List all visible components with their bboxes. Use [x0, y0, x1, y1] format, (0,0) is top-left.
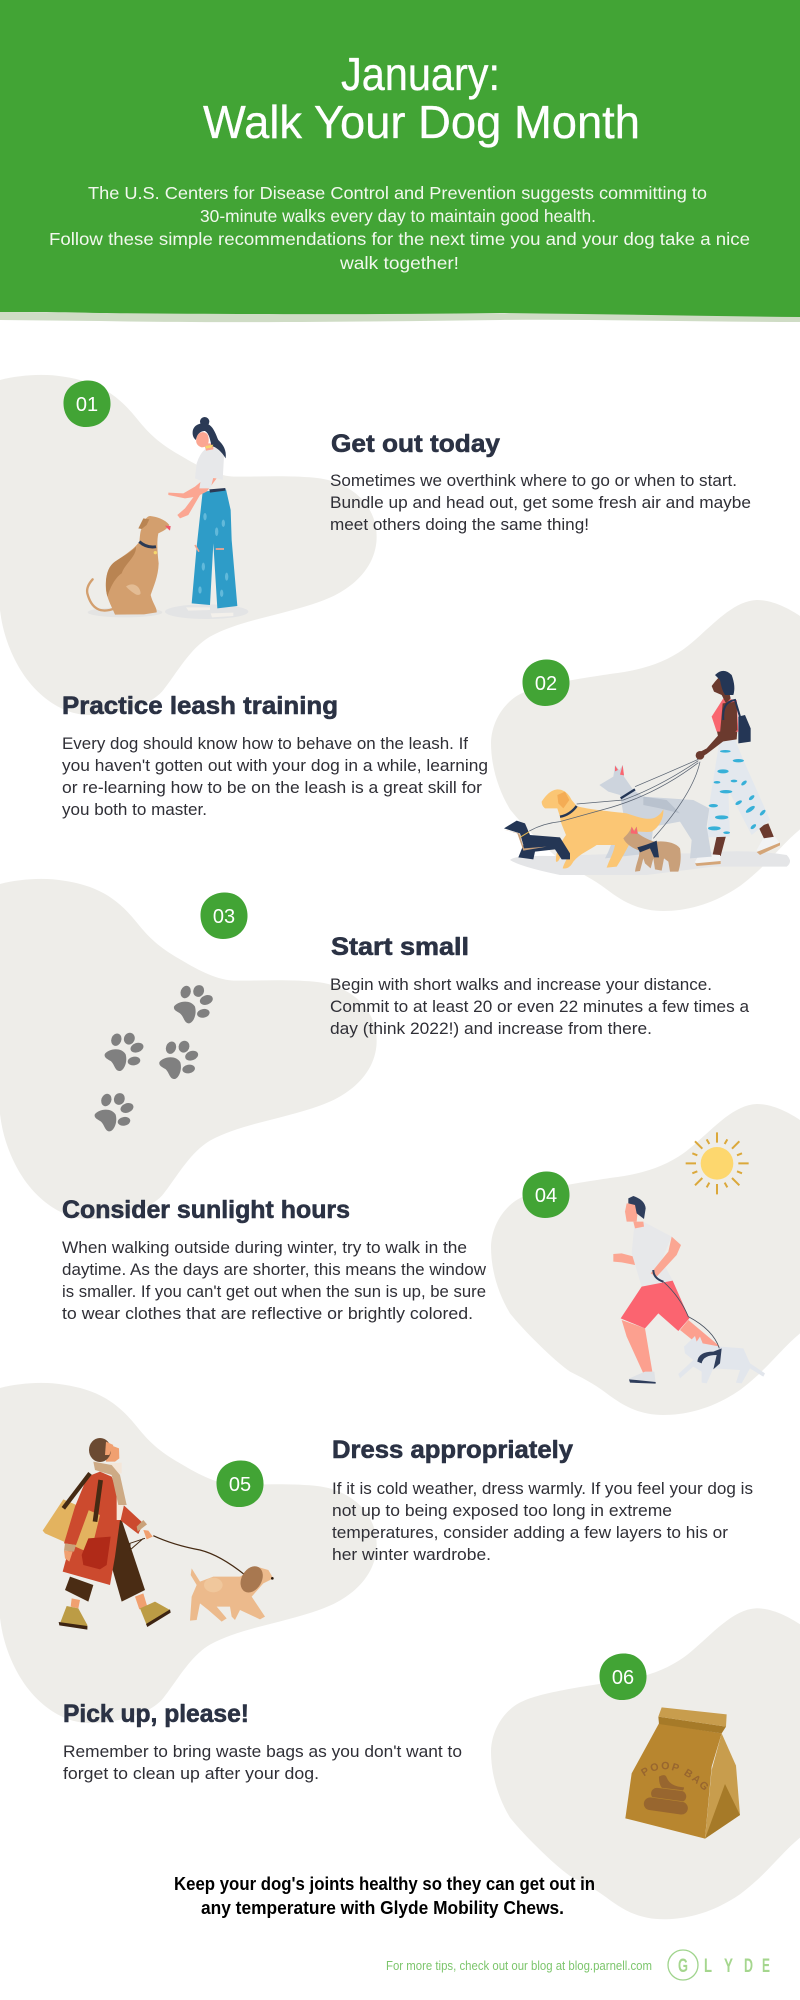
- intro text: Follow these simple recommendations for the next time you and your dog take a nice: [49, 229, 750, 249]
- background blob 3: [0, 879, 377, 1219]
- number badge 04: [522, 1171, 570, 1218]
- illustration: woman in red coat walking dog: [43, 1438, 274, 1630]
- logo: Glyde: L: [704, 1956, 712, 1977]
- background blob 4: [491, 1104, 800, 1415]
- body text: Begin with short walks and increase your distance.: [330, 976, 712, 994]
- body text: When walking outside during winter, try to walk in the: [62, 1239, 467, 1257]
- number badge 04: 04: [535, 1185, 557, 1207]
- icon: sun: [686, 1132, 749, 1194]
- footer: [386, 1950, 770, 1980]
- background blob 2: [491, 600, 800, 911]
- number badge 05: 05: [229, 1474, 251, 1496]
- panel: step 2 practice leash training: [62, 600, 800, 911]
- body text: Commit to at least 20 or even 22 minutes a few times a: [330, 998, 750, 1016]
- number badge 01: 01: [76, 394, 98, 416]
- callout: closing message: [174, 1874, 595, 1918]
- number badge 06: 06: [612, 1667, 634, 1689]
- panel: step 3 start small: [0, 879, 750, 1219]
- intro text: [49, 183, 750, 273]
- body text: temperatures, consider adding a few layers to his or: [332, 1524, 729, 1542]
- body text: Bundle up and head out, get some fresh air and maybe: [330, 494, 751, 512]
- heading: Get out today: [331, 430, 500, 458]
- number badge 03: 03: [213, 906, 235, 928]
- body text: to wear clothes that are reflective or brightly colored.: [62, 1305, 473, 1323]
- icon: poop bag: [625, 1707, 740, 1839]
- icon: poop bag: POOP BAG: [640, 1762, 708, 1790]
- number badge 01: [63, 380, 111, 427]
- body text: [332, 1480, 753, 1564]
- body text: meet others doing the same thing!: [330, 516, 589, 534]
- background blob 1: [0, 375, 377, 715]
- icon: paw prints: [95, 983, 214, 1131]
- background blob 5: [0, 1383, 377, 1723]
- body text: is smaller. If you can't get out when the sun is up, be sure: [62, 1283, 486, 1301]
- logo: Glyde: G: [678, 1956, 688, 1977]
- body text: or re-learning how to be on the leash is a great skill for: [62, 779, 483, 797]
- number badge 06: [599, 1653, 647, 1700]
- intro text: The U.S. Centers for Disease Control and Prevention suggests committing to: [88, 183, 707, 203]
- body text: [330, 472, 751, 534]
- panel: step 6 pick up please: [63, 1608, 800, 1952]
- body text: Every dog should know how to behave on the leash. If: [62, 735, 468, 753]
- callout: closing message: Keep your dog's joints healthy so they can get out in: [174, 1874, 595, 1894]
- background blob 6: [491, 1608, 800, 1919]
- logo: Glyde: Y: [724, 1956, 733, 1977]
- body text: you both to master.: [62, 801, 207, 819]
- body text: Sometimes we overthink where to go or when to start.: [330, 472, 737, 490]
- heading: Consider sunlight hours: [62, 1196, 350, 1224]
- body text: daytime. As the days are shorter, this means the window: [62, 1261, 486, 1279]
- panel: step 5 dress appropriately: [0, 1383, 753, 1723]
- number badge 02: 02: [535, 673, 557, 695]
- logo: Glyde: E: [762, 1956, 770, 1977]
- body text: [62, 735, 488, 819]
- intro text: walk together!: [339, 253, 459, 273]
- title: January:: [341, 48, 500, 100]
- intro text: 30-minute walks every day to maintain good health.: [200, 206, 596, 226]
- body text: [63, 1743, 462, 1783]
- logo: Glyde: [668, 1950, 770, 1980]
- number badge 05: [216, 1460, 264, 1507]
- body text: her winter wardrobe.: [332, 1546, 491, 1564]
- heading: Practice leash training: [62, 692, 338, 720]
- panel: step 4 consider sunlight hours: [62, 1104, 800, 1415]
- header banner: [0, 0, 800, 322]
- heading: Pick up, please!: [63, 1700, 249, 1728]
- body text: [330, 976, 750, 1038]
- heading: Dress appropriately: [332, 1436, 573, 1464]
- body text: day (think 2022!) and increase from there.: [330, 1020, 652, 1038]
- illustration: woman walking four dogs: [504, 671, 790, 875]
- number badge 02: [522, 659, 570, 706]
- title: Walk Your Dog Month: [203, 96, 640, 148]
- callout: closing message: any temperature with Glyde Mobility Chews.: [201, 1898, 564, 1918]
- heading: Start small: [331, 933, 469, 961]
- number badge 03: [200, 892, 248, 939]
- body text: not up to being exposed too long in extreme: [332, 1502, 672, 1520]
- body text: forget to clean up after your dog.: [63, 1765, 319, 1783]
- body text: you haven't gotten out with your dog in a while, learning: [62, 757, 488, 775]
- panel: step 1 get out today: [0, 375, 751, 715]
- illustration: man jogging with dog: [613, 1196, 765, 1384]
- blog link text: For more tips, check out our blog at blog.parnell.com: [386, 1959, 652, 1973]
- logo: Glyde: D: [744, 1956, 753, 1977]
- body text: [62, 1239, 486, 1323]
- body text: If it is cold weather, dress warmly. If you feel your dog is: [332, 1480, 753, 1498]
- illustration: woman and sitting dog: [87, 417, 248, 619]
- title: [203, 48, 640, 148]
- body text: Remember to bring waste bags as you don't want to: [63, 1743, 462, 1761]
